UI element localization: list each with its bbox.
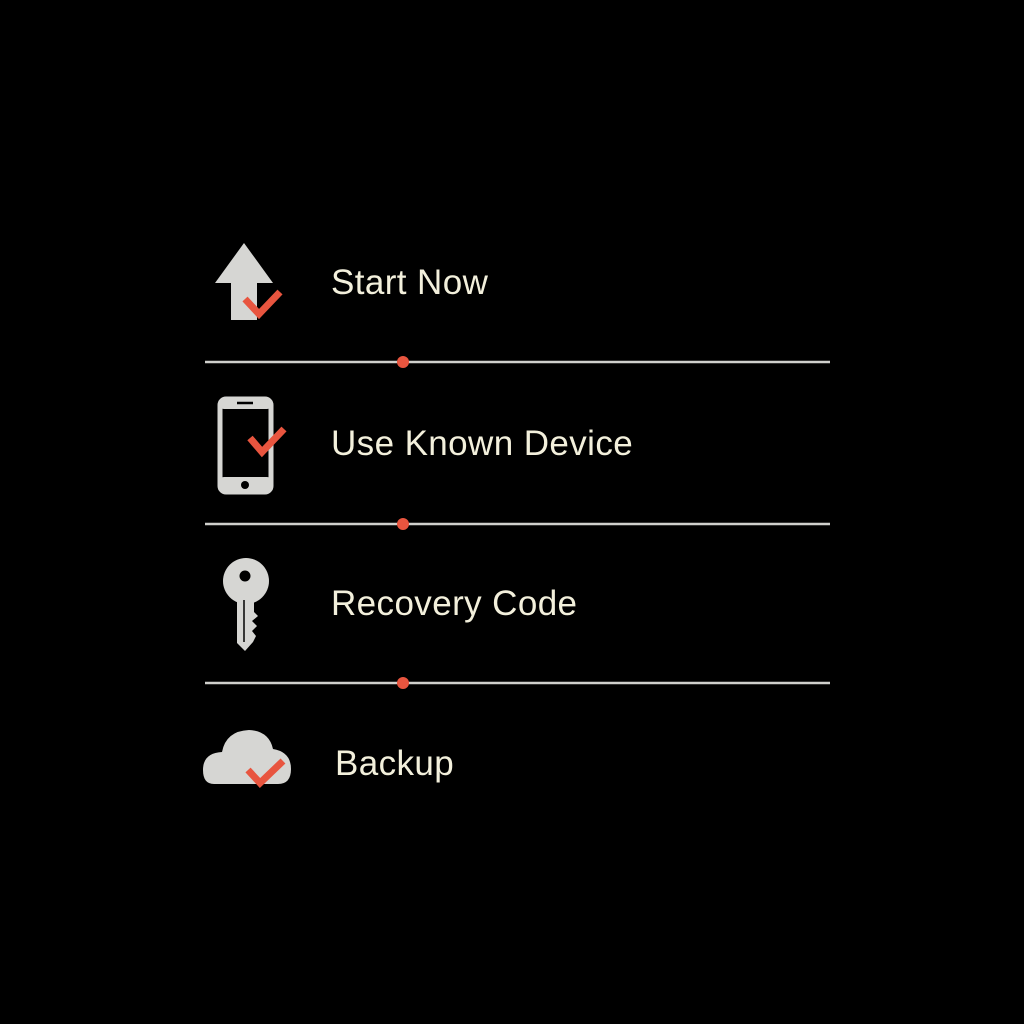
label: Backup: Backup bbox=[335, 744, 454, 783]
divider 2 with dot bbox=[205, 518, 830, 530]
icon: upload arrow with check bbox=[215, 243, 280, 320]
label: Start Now: Start Now bbox=[331, 263, 489, 302]
icon: key bbox=[223, 558, 269, 651]
divider 1 with dot bbox=[205, 356, 830, 368]
label: Use Known Device: Use Known Device bbox=[331, 424, 633, 463]
divider 3 with dot bbox=[205, 677, 830, 689]
icon: phone with check bbox=[220, 399, 284, 492]
label: Recovery Code: Recovery Code bbox=[331, 584, 577, 623]
icon: cloud with check bbox=[203, 730, 291, 784]
